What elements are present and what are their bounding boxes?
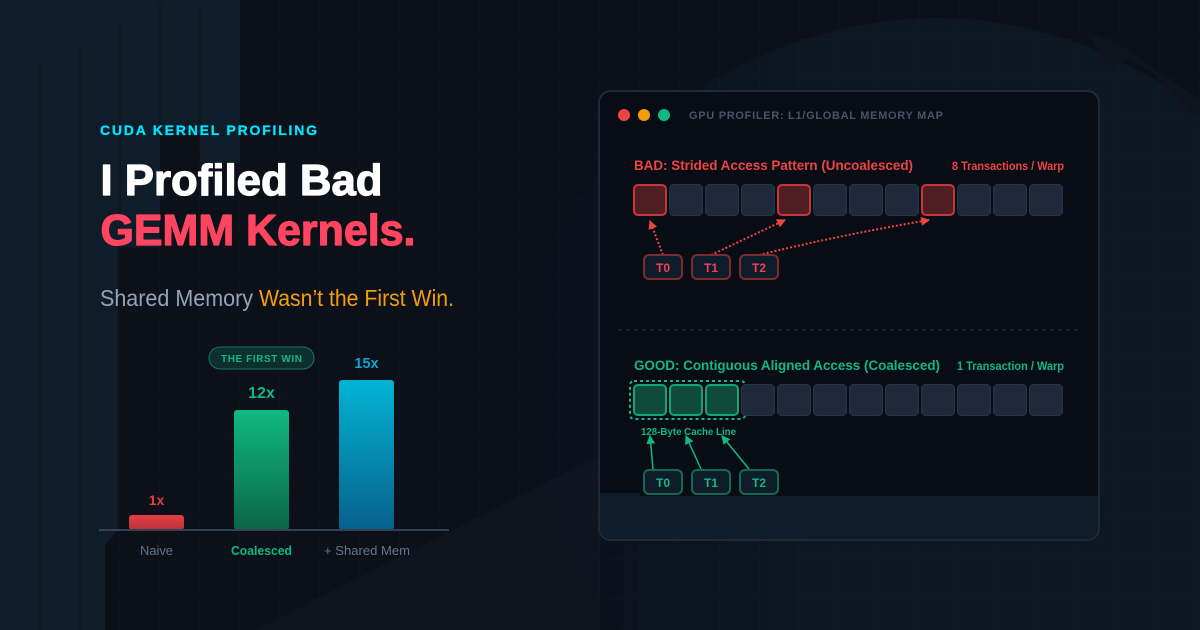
cache line outline (630, 381, 745, 419)
good transaction count: 1 Transaction / Warp (957, 359, 1064, 373)
window controls (618, 109, 670, 121)
bar: shared memory 15x (339, 356, 394, 530)
bar: naive 1x (129, 492, 184, 530)
good heading: GOOD: Contiguous Aligned Access (Coalesced) (634, 357, 940, 373)
bad thread chips: T1 (704, 261, 718, 275)
bad thread chips: T2 (752, 261, 766, 275)
panel: GPU profiler memory map (599, 91, 1099, 540)
title: GEMM Kernels. (100, 206, 416, 255)
bad thread chips (644, 255, 778, 279)
bar: shared memory 15x: 15x (354, 356, 379, 372)
good thread chips: T1 (704, 476, 718, 490)
bar chart (99, 347, 449, 558)
good thread chips: T2 (752, 476, 766, 490)
bar: coalesced 12x: 12x (248, 385, 275, 402)
axis labels: + Shared Mem (324, 543, 410, 558)
panel header: GPU PROFILER: L1/GLOBAL MEMORY MAP (689, 110, 943, 122)
bad memory cells (634, 184, 1062, 216)
good solid arrows (650, 436, 749, 469)
title: I Profiled Bad (100, 156, 382, 205)
subtitle (100, 285, 454, 311)
subtitle: Shared Memory (100, 285, 253, 311)
bad thread chips: T0 (656, 261, 670, 275)
eyebrow: CUDA Kernel Profiling: CUDA KERNEL PROFILING (100, 122, 317, 138)
bar: naive 1x: 1x (149, 492, 164, 508)
title (100, 156, 416, 255)
axis labels: Coalesced (231, 543, 292, 558)
bad transaction count: 8 Transactions / Warp (952, 159, 1064, 173)
bad dotted arrows (650, 220, 929, 255)
axis labels: Naive (140, 543, 173, 558)
good thread chips: T0 (656, 476, 670, 490)
bar: coalesced 12x (234, 385, 289, 530)
good thread chips (644, 470, 778, 494)
good memory cells (634, 384, 1062, 416)
cache line label: 128-Byte Cache Line (641, 426, 736, 438)
badge: the first win (209, 347, 314, 369)
axis labels (140, 543, 410, 558)
subtitle: Wasn’t the First Win. (259, 285, 454, 311)
good section (630, 357, 1064, 494)
bad heading: BAD: Strided Access Pattern (Uncoalesced) (634, 157, 913, 173)
badge: the first win: THE FIRST WIN (221, 354, 302, 365)
bad section (634, 157, 1064, 279)
